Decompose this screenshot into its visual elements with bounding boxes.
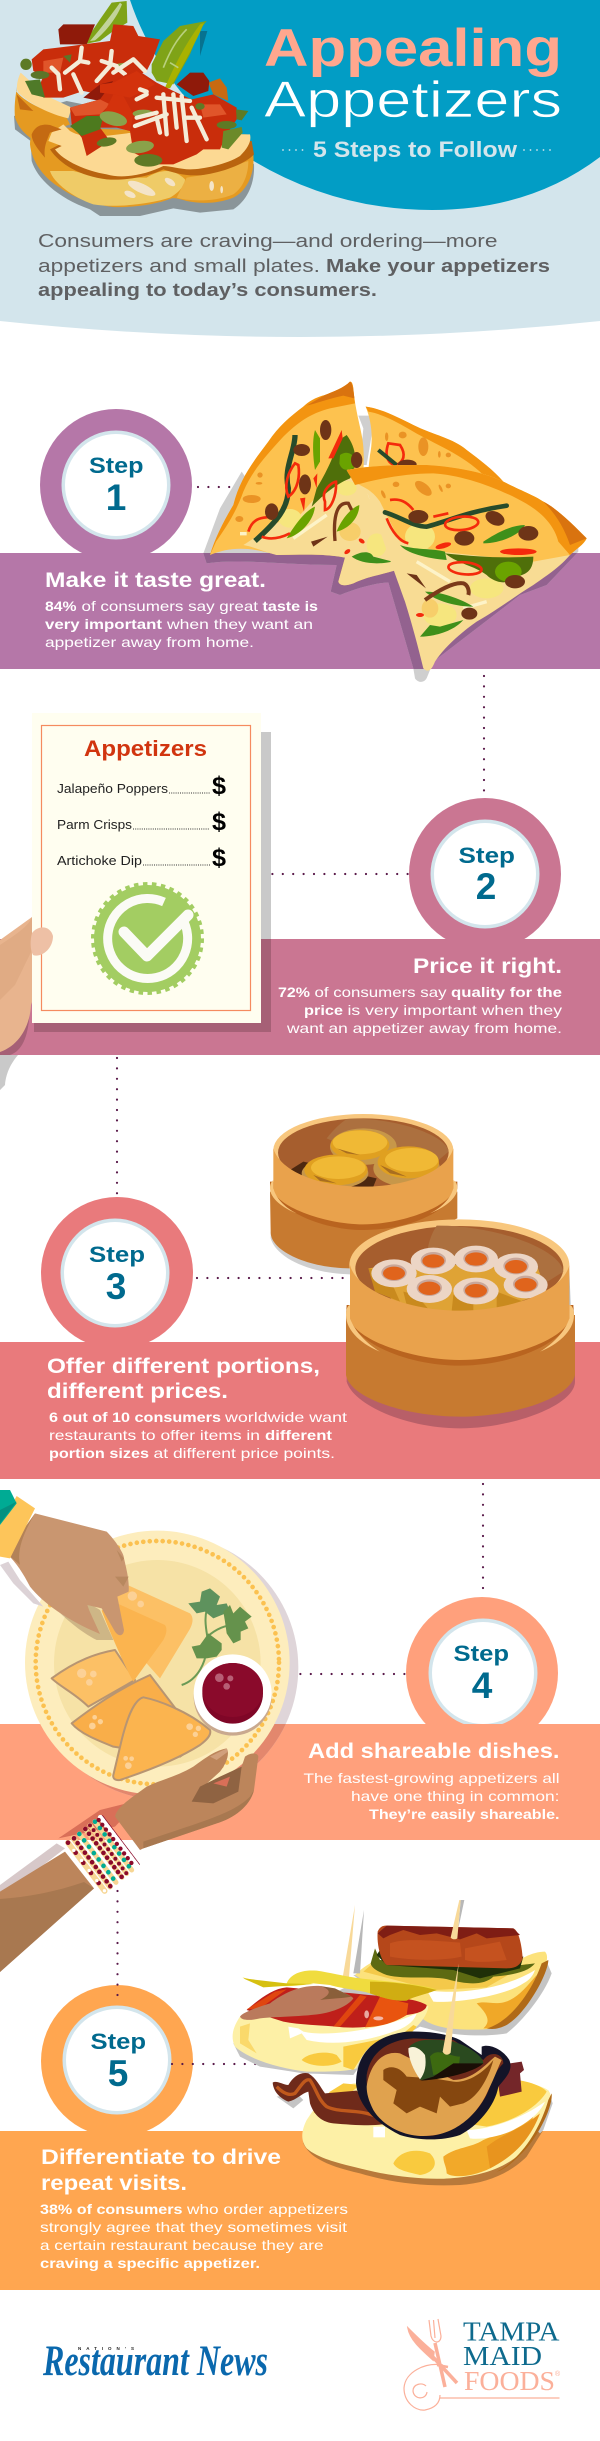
step 2 text: price — [304, 1002, 343, 1018]
menu card — [32, 713, 261, 1023]
intro text: appetizers and small plates. — [38, 255, 320, 276]
step 3 badge — [41, 1197, 193, 1349]
title — [264, 19, 562, 128]
menu items: $ — [212, 808, 226, 836]
step 3 text: Offer different portions, — [47, 1354, 320, 1378]
step 2 text: want an appetizer away from home. — [286, 1020, 562, 1036]
intro text: Consumers are craving—and ordering—more — [38, 230, 498, 251]
step 2 text: 72% — [278, 984, 311, 1000]
step 4 band — [0, 1724, 600, 1840]
panel: step 4 — [0, 1490, 600, 1972]
subtitle: 5 steps to follow: 5 Steps to Follow — [313, 137, 518, 162]
menu items: Parm Crisps — [57, 817, 133, 832]
panel: step 2 — [0, 713, 600, 1090]
bacon — [273, 2062, 524, 2125]
step 1 text: very important — [45, 616, 162, 632]
step 1 text: Make it taste great. — [45, 568, 266, 592]
step 2 text: quality for the — [451, 984, 562, 1000]
step 5 text: repeat visits. — [41, 2171, 187, 2195]
step 3 text: at different price points. — [154, 1445, 335, 1461]
logo: Tampa Maid Foods — [404, 2316, 561, 2410]
step 4 badge — [406, 1597, 558, 1749]
parsley — [182, 1588, 252, 1685]
panel: step 5 — [0, 1891, 600, 2290]
step 5 text: 38% of consumers — [40, 2201, 183, 2217]
illustration: skewered appetizers — [233, 1900, 553, 2185]
icon: bruschetta — [14, 1, 254, 216]
step 4 badge: Step — [454, 1641, 509, 1666]
step 1 text: taste is — [262, 598, 318, 614]
step 2 badge — [409, 798, 561, 950]
connector lines — [117, 487, 484, 1674]
step 5 text: craving a specific appetizer. — [40, 2255, 260, 2271]
front slice — [347, 465, 587, 671]
top hand — [0, 1490, 129, 1640]
step 4 text: have one thing in common: — [351, 1788, 560, 1804]
panel: step 1 — [0, 382, 600, 682]
step 1 text — [45, 568, 318, 650]
step 3 text — [47, 1354, 347, 1461]
illustration: hand holding menu — [0, 713, 271, 1090]
sauce cup — [194, 1654, 272, 1736]
step 3 text: restaurants to offer items in — [49, 1427, 260, 1443]
step 2 band — [0, 939, 600, 1055]
step 1 text: 84% — [45, 598, 77, 614]
logo: Tampa Maid Foods: FOODS — [464, 2366, 555, 2396]
step 1 badge: Step — [89, 453, 144, 478]
step 5 text: strongly agree that they sometimes visit — [40, 2219, 347, 2235]
step 5 badge: 5 — [108, 2053, 128, 2094]
logo: Tampa Maid Foods: MAID — [463, 2341, 542, 2371]
step 1 text: of consumers say great — [82, 598, 258, 614]
step 4 badge: 4 — [472, 1665, 493, 1706]
icon: pizza slices — [203, 382, 587, 682]
step 2 text: is very important when they — [348, 1002, 562, 1018]
left tomatoes and lettuce — [20, 1, 160, 98]
step 1 text: when they want an — [166, 616, 313, 632]
step 2 text: of consumers say — [314, 984, 446, 1000]
step 3 text: 6 out of 10 consumers — [49, 1409, 221, 1425]
header panel — [0, 0, 600, 337]
connector lines — [118, 1891, 289, 2064]
step 1 text: appetizer away from home. — [45, 634, 254, 650]
right lettuce — [152, 21, 207, 84]
step 1 badge: 1 — [106, 477, 126, 518]
back steamer — [270, 1114, 457, 1274]
logo: Tampa Maid Foods: ® — [555, 2370, 561, 2378]
step 5 badge: Step — [90, 2029, 146, 2054]
front tomatoes — [70, 69, 248, 167]
back crostini — [353, 1900, 552, 2035]
back slice — [366, 407, 503, 485]
step 5 text: who order appetizers — [186, 2201, 348, 2217]
step 3 badge: Step — [89, 1242, 145, 1267]
step 3 text: portion sizes — [49, 1445, 149, 1461]
menu items: Jalapeño Poppers — [57, 781, 169, 796]
step 5 badge — [41, 1985, 193, 2137]
step 3 badge: 3 — [106, 1266, 126, 1307]
panel: step 3 — [0, 1114, 600, 1479]
thumb — [31, 927, 53, 956]
step 5 text: Differentiate to drive — [41, 2145, 281, 2169]
menu items: Artichoke Dip — [57, 853, 142, 868]
intro text: Make your appetizers — [326, 255, 550, 276]
step 2 text: Price it right. — [413, 954, 562, 978]
logo: Tampa Maid Foods: TAMPA — [463, 2316, 560, 2346]
left slice — [210, 382, 397, 585]
step 3 text: different — [265, 1427, 332, 1443]
bottom crostini — [273, 1963, 553, 2185]
menu heading: Appetizers — [84, 736, 207, 761]
front steamer — [346, 1219, 575, 1428]
step 2 badge: Step — [458, 843, 515, 868]
step 5 text — [40, 2145, 348, 2271]
step 3 text: worldwide want — [224, 1409, 347, 1425]
step 2 text — [278, 954, 562, 1036]
icon: bamboo steamers — [270, 1114, 575, 1428]
step 1 band — [0, 553, 600, 669]
title: Appealing — [264, 19, 562, 78]
step 1 badge — [40, 409, 192, 561]
icon: knife, fork and swirl — [404, 2319, 560, 2410]
step 4 text: The fastest-growing appetizers all — [304, 1770, 560, 1786]
bangles — [68, 1816, 139, 1891]
step 4 text: They’re easily shareable. — [369, 1806, 560, 1822]
step 4 text: Add shareable dishes. — [308, 1739, 560, 1763]
step 4 text — [304, 1739, 560, 1822]
logo: Nation's Restaurant News: Restaurant News — [42, 2338, 268, 2385]
step 5 text: a certain restaurant because they are — [40, 2237, 324, 2253]
intro text: appealing to today’s consumers. — [38, 279, 377, 300]
middle crostini — [233, 1905, 437, 2075]
blue title shape — [130, 0, 600, 210]
samosas — [52, 1580, 210, 1780]
step 3 band — [0, 1342, 600, 1479]
step 2 badge: 2 — [476, 866, 496, 907]
menu items — [57, 772, 226, 872]
title: Appetizers — [264, 71, 562, 128]
bottom hand and arm — [0, 1748, 258, 1972]
menu items: $ — [212, 772, 226, 800]
mushroom — [356, 1963, 511, 2139]
menu items: $ — [212, 844, 226, 872]
icon: check badge — [93, 884, 202, 993]
step 3 text: different prices. — [47, 1379, 228, 1403]
step 5 band — [0, 2131, 600, 2290]
logo: Nation's Restaurant News: NATION’S — [78, 2346, 134, 2351]
illustration: plate of samosas — [0, 1490, 298, 1972]
